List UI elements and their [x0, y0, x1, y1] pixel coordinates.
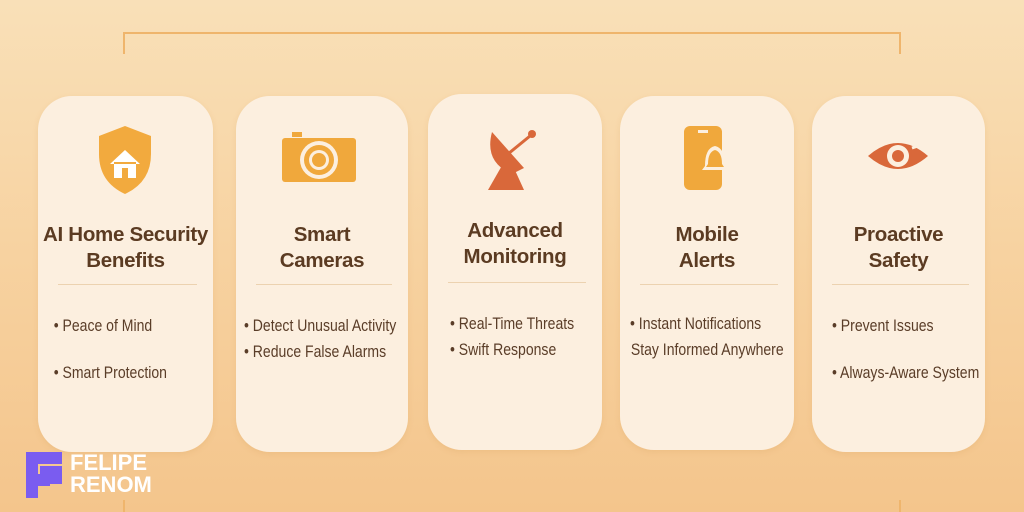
icon: eye [868, 143, 928, 169]
panel: Advanced Monitoring: • Real-Time Threats [450, 315, 574, 333]
panel: Mobile Alerts [620, 96, 794, 450]
panel: Advanced Monitoring: • Swift Response [450, 341, 556, 359]
heading: Monitoring [464, 245, 566, 268]
logo: Felipe Renom [26, 450, 152, 498]
panel: AI Home Security Benefits: • Peace of Mind [54, 317, 152, 335]
icon: satellite dish [488, 130, 536, 190]
heading: Safety [869, 249, 928, 272]
heading: Mobile [675, 223, 739, 246]
icon: camera [282, 132, 356, 182]
panel: Smart Cameras: • Detect Unusual Activity [244, 317, 396, 335]
heading: Advanced [467, 219, 563, 242]
bullets [54, 317, 167, 382]
heading: Proactive [854, 223, 943, 246]
panel: Proactive Safety: • Always-Aware System [832, 364, 979, 382]
heading: AI Home Security [43, 223, 208, 246]
heading: Alerts [679, 249, 735, 272]
bullets [832, 317, 979, 382]
panel: Smart Cameras [236, 96, 408, 452]
heading: Cameras [280, 249, 364, 272]
panel: Proactive Safety: • Prevent Issues [832, 317, 934, 335]
heading [854, 223, 943, 272]
panel: Mobile Alerts: • Instant Notifications [630, 315, 761, 333]
panel: Advanced Monitoring [428, 94, 602, 450]
heading [43, 223, 208, 272]
panel: AI Home Security Benefits [38, 96, 213, 452]
bullets [450, 315, 574, 359]
bullets [244, 317, 396, 361]
icon: shield home [99, 126, 151, 194]
heading [675, 223, 739, 272]
icon: phone bell [684, 126, 724, 190]
logo: Felipe Renom: RENOM [70, 472, 152, 497]
heading [464, 219, 566, 268]
panel: Mobile Alerts: Stay Informed Anywhere [631, 341, 784, 359]
panel: Proactive Safety [812, 96, 985, 452]
panel: AI Home Security Benefits: • Smart Protection [54, 364, 167, 382]
panel: Smart Cameras: • Reduce False Alarms [244, 343, 386, 361]
heading [280, 223, 364, 272]
heading: Benefits [86, 249, 165, 272]
heading: Smart [294, 223, 350, 246]
logo: Felipe Renom: FELIPE [70, 450, 147, 475]
bullets [630, 315, 784, 359]
